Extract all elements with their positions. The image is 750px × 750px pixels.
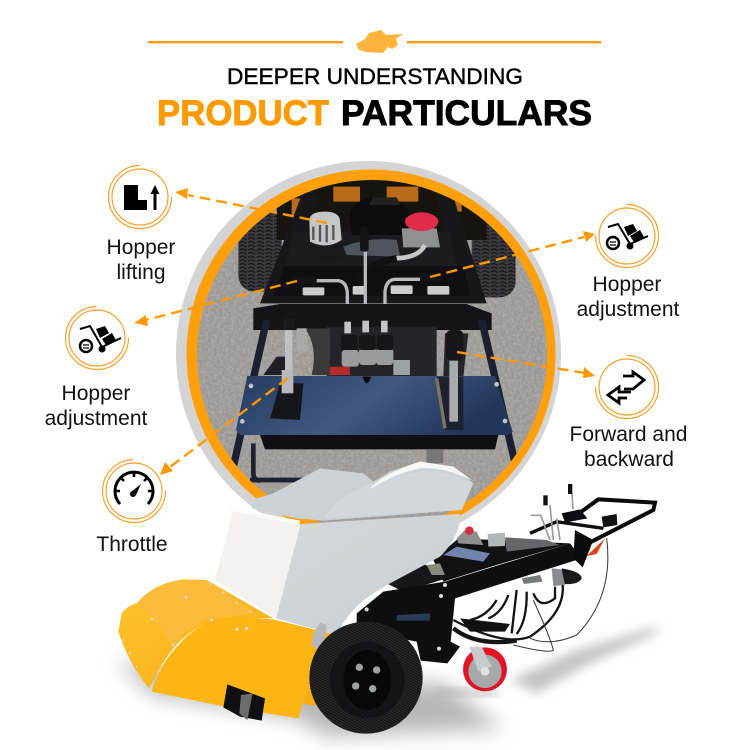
white valves	[303, 285, 449, 295]
icon: hopper lifting	[108, 166, 172, 228]
arrow: forward and backward	[457, 352, 595, 378]
hopper lid	[252, 462, 473, 521]
frame bolts	[365, 583, 447, 651]
side rails	[233, 320, 517, 470]
photo: machine chassis close-up	[197, 180, 547, 522]
hoses	[453, 585, 563, 639]
arrow: hopper lifting	[175, 188, 327, 223]
icon: forward and backward	[596, 356, 658, 418]
title: PARTICULARS	[341, 94, 592, 133]
label: hopper adjustment right	[577, 273, 680, 321]
machine shadow	[117, 627, 657, 737]
yellow side guard	[152, 617, 337, 718]
frame	[260, 195, 487, 303]
fuel cap	[309, 212, 342, 245]
valve and pedal	[562, 568, 582, 584]
label: hopper adjustment right: adjustment	[577, 298, 680, 321]
yellow drum top	[118, 579, 273, 688]
top dark engine bay	[277, 173, 487, 240]
bracket	[223, 684, 265, 721]
label: hopper lifting	[107, 236, 175, 284]
machine: rear frame and handle	[357, 484, 655, 691]
label: hopper adjustment left: adjustment	[45, 407, 148, 430]
label: hopper adjustment left	[45, 382, 148, 430]
title	[157, 64, 592, 133]
label: forward and backward	[570, 423, 687, 471]
circular photo frame	[176, 161, 561, 546]
blue plate	[236, 376, 513, 435]
tyres	[238, 210, 516, 297]
latch	[312, 623, 327, 653]
label: hopper adjustment right: Hopper	[593, 273, 661, 296]
label: forward and backward: Forward and	[570, 423, 687, 446]
red cap	[402, 228, 440, 247]
icon: hopper adjustment right	[596, 204, 658, 268]
drum rivets	[122, 583, 251, 668]
arrow: throttle	[160, 378, 288, 475]
label: hopper lifting: lifting	[116, 261, 166, 284]
handle	[580, 499, 655, 547]
red wheel behind handle	[587, 538, 605, 556]
main wheel	[309, 622, 423, 734]
under-frame gap	[327, 327, 437, 377]
title: PRODUCT	[157, 94, 329, 133]
control levers	[531, 493, 573, 540]
label: hopper lifting: Hopper	[107, 236, 175, 259]
white hopper front panel	[215, 510, 301, 618]
bolts	[240, 382, 507, 424]
grey hopper side panel	[276, 514, 460, 635]
title: DEEPER UNDERSTANDING	[227, 64, 523, 89]
lever assemblies	[285, 330, 292, 370]
arrow: hopper adjustment left	[134, 281, 297, 326]
cross bar	[253, 304, 492, 330]
tank and engine on chassis	[433, 538, 570, 582]
label: throttle: Throttle	[96, 533, 168, 556]
hopper rim trim	[228, 507, 300, 525]
control valve block	[342, 348, 393, 367]
label: hopper adjustment left: Hopper	[62, 382, 130, 405]
icon: hopper adjustment left	[66, 306, 128, 369]
label: forward and backward: backward	[584, 448, 674, 471]
caster wheel	[463, 647, 507, 691]
arrow: hopper adjustment right	[430, 231, 595, 277]
icon: throttle	[102, 460, 166, 522]
levers	[316, 251, 420, 304]
machine: yellow sweeper housing and hopper	[118, 462, 473, 734]
header ornament	[148, 30, 601, 53]
main beam	[357, 543, 582, 663]
